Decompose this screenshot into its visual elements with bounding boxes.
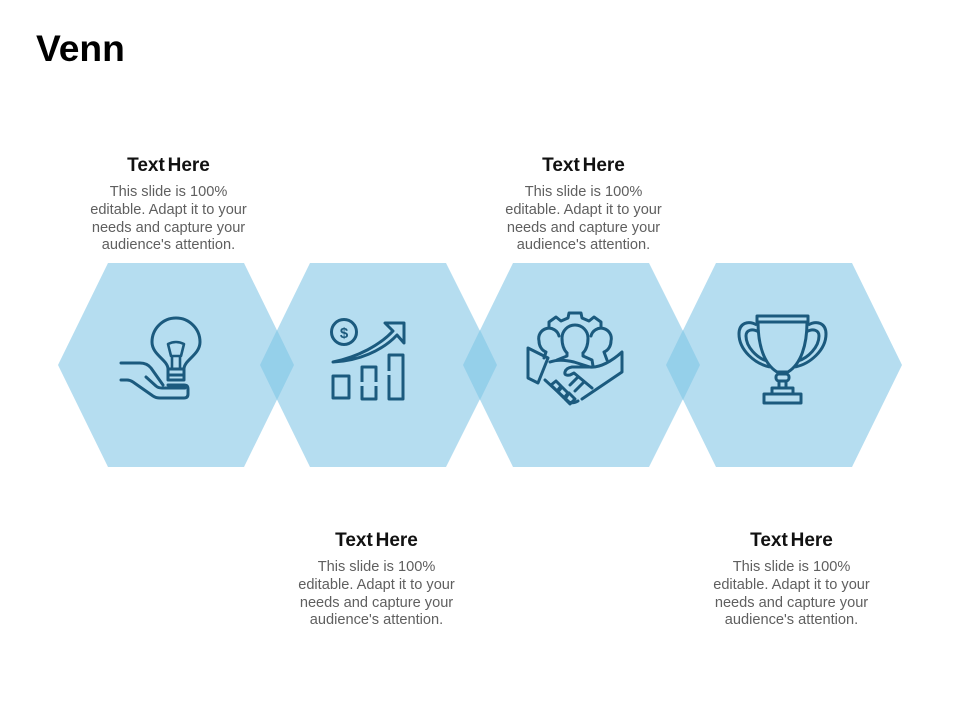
text block: top middle: editable. Adapt it to your xyxy=(505,202,662,218)
text block: top middle: This slide is 100% xyxy=(525,184,642,200)
text block: bottom middle-left: audience's attention. xyxy=(310,612,443,628)
text block: top left xyxy=(90,155,247,253)
text block: bottom middle-left xyxy=(298,530,455,628)
hexagon 2 xyxy=(260,263,497,467)
text block: top left: This slide is 100% xyxy=(110,184,227,200)
text block: bottom right: This slide is 100% xyxy=(733,559,850,575)
overlap 3 xyxy=(666,330,700,400)
text block: top middle xyxy=(505,155,662,253)
text block: bottom middle-left: needs and capture your xyxy=(300,595,453,611)
title: Venn xyxy=(36,27,125,69)
text block: top middle: Text Here xyxy=(542,155,625,176)
text block: top middle: needs and capture your xyxy=(507,220,660,236)
text block: bottom middle-left: editable. Adapt it to your xyxy=(298,577,455,593)
dollar sign: $ xyxy=(340,325,349,342)
text block: bottom middle-left: This slide is 100% xyxy=(318,559,435,575)
text block: bottom middle-left: Text Here xyxy=(335,530,418,551)
text block: top left: editable. Adapt it to your xyxy=(90,202,247,218)
hexagon 3 xyxy=(463,263,700,467)
hexagon 1 xyxy=(58,263,294,467)
icon: light bulb on hand xyxy=(121,318,200,398)
overlap 2 xyxy=(463,330,497,400)
text block: top middle: audience's attention. xyxy=(517,237,650,253)
text block: top left: needs and capture your xyxy=(92,220,245,236)
text block: top left: audience's attention. xyxy=(102,237,235,253)
text block: top left: Text Here xyxy=(127,155,210,176)
text block: bottom right: audience's attention. xyxy=(725,612,858,628)
icon: trophy xyxy=(739,316,826,403)
text block: bottom right xyxy=(713,530,870,628)
text block: bottom right: Text Here xyxy=(750,530,833,551)
text block: bottom right: editable. Adapt it to your xyxy=(713,577,870,593)
icon: growth chart with dollar xyxy=(332,320,404,399)
icon: handshake with team and gear xyxy=(528,313,622,404)
overlap 1 xyxy=(260,330,294,400)
text block: bottom right: needs and capture your xyxy=(715,595,868,611)
hexagon 4 xyxy=(666,263,902,467)
